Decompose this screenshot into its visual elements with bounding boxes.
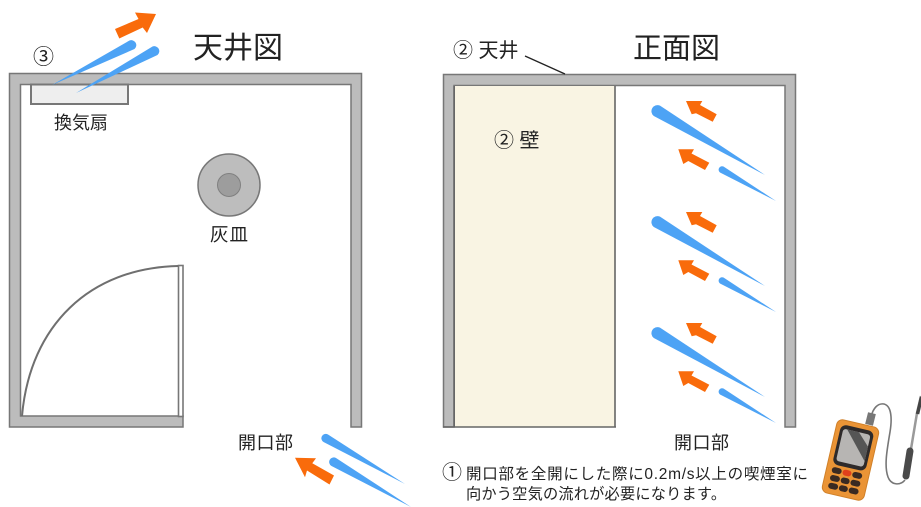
wall panel	[455, 86, 615, 427]
label: wall: ② 壁	[494, 129, 540, 152]
airflow set 2	[651, 212, 776, 312]
exhaust arrow	[115, 12, 156, 38]
panel: front view	[443, 74, 796, 453]
label: opening on plan: 開口部	[238, 433, 293, 453]
label: fan: 換気扇	[54, 113, 108, 133]
orange arrow	[295, 458, 334, 484]
title: ceiling plan: 天井図	[193, 32, 283, 65]
label: number 3: ③	[33, 46, 54, 69]
air streaks	[321, 434, 411, 507]
room walls	[10, 74, 362, 427]
ashtray	[198, 154, 260, 216]
ventilation fan	[31, 84, 128, 104]
number 1: ①	[442, 461, 462, 484]
airflow set 3	[651, 323, 776, 423]
wall base line	[443, 86, 616, 427]
connector	[865, 412, 876, 426]
airflow set 1	[651, 101, 776, 201]
cable	[871, 404, 905, 484]
panel: ceiling plan	[10, 12, 362, 427]
room frame	[444, 74, 796, 427]
leader line	[525, 56, 565, 74]
icon: air speed meter	[821, 396, 921, 501]
meter body	[821, 419, 880, 501]
note	[442, 461, 808, 503]
title: front view: 正面図	[633, 33, 720, 65]
note line 1: 開口部を全開にした際に0.2m/s以上の喫煙室に	[466, 465, 808, 483]
label: ashtray: 灰皿	[210, 224, 248, 245]
label: ceiling: ② 天井	[453, 39, 519, 62]
probe	[906, 396, 921, 476]
exhaust air streaks	[52, 40, 159, 93]
note line 2: 向かう空気の流れが必要になります。	[466, 486, 726, 503]
incoming airflow at opening	[295, 434, 411, 507]
label: opening: 開口部	[674, 433, 729, 453]
door	[22, 266, 183, 416]
